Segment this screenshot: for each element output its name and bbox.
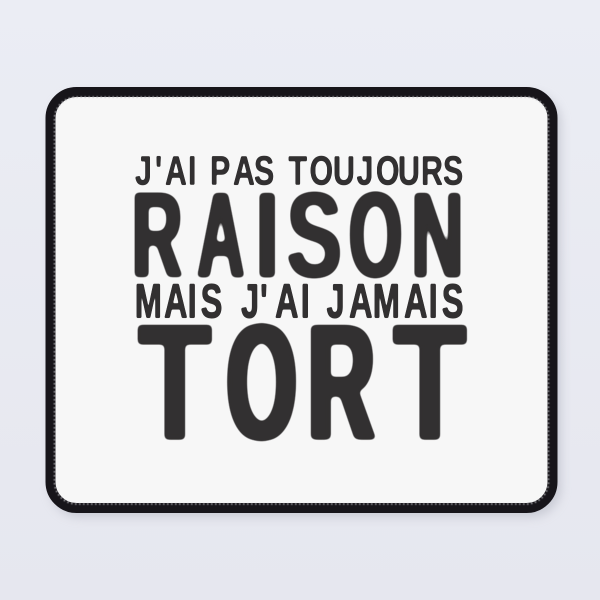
border stitching xyxy=(54,97,548,504)
line 2: RAISON: O xyxy=(349,167,402,303)
line 4: TORT: O xyxy=(226,290,296,474)
line 4: TORT: T xyxy=(392,290,466,474)
line 3: MAIS J'AI JAMAIS xyxy=(135,274,463,328)
line 2: RAISON: N xyxy=(411,167,464,303)
pad stitched border xyxy=(50,92,552,508)
line 2: RAISON: S xyxy=(286,167,341,303)
line 4: TORT: R xyxy=(308,290,375,474)
line 2: RAISON: I xyxy=(257,167,278,303)
line 4: TORT: T xyxy=(138,290,211,474)
line 1: J'AI PAS TOUJOURS xyxy=(135,147,463,194)
line 2: RAISON: A xyxy=(197,167,244,303)
pad shadow xyxy=(50,93,561,517)
line 2: RAISON: R xyxy=(132,167,182,303)
